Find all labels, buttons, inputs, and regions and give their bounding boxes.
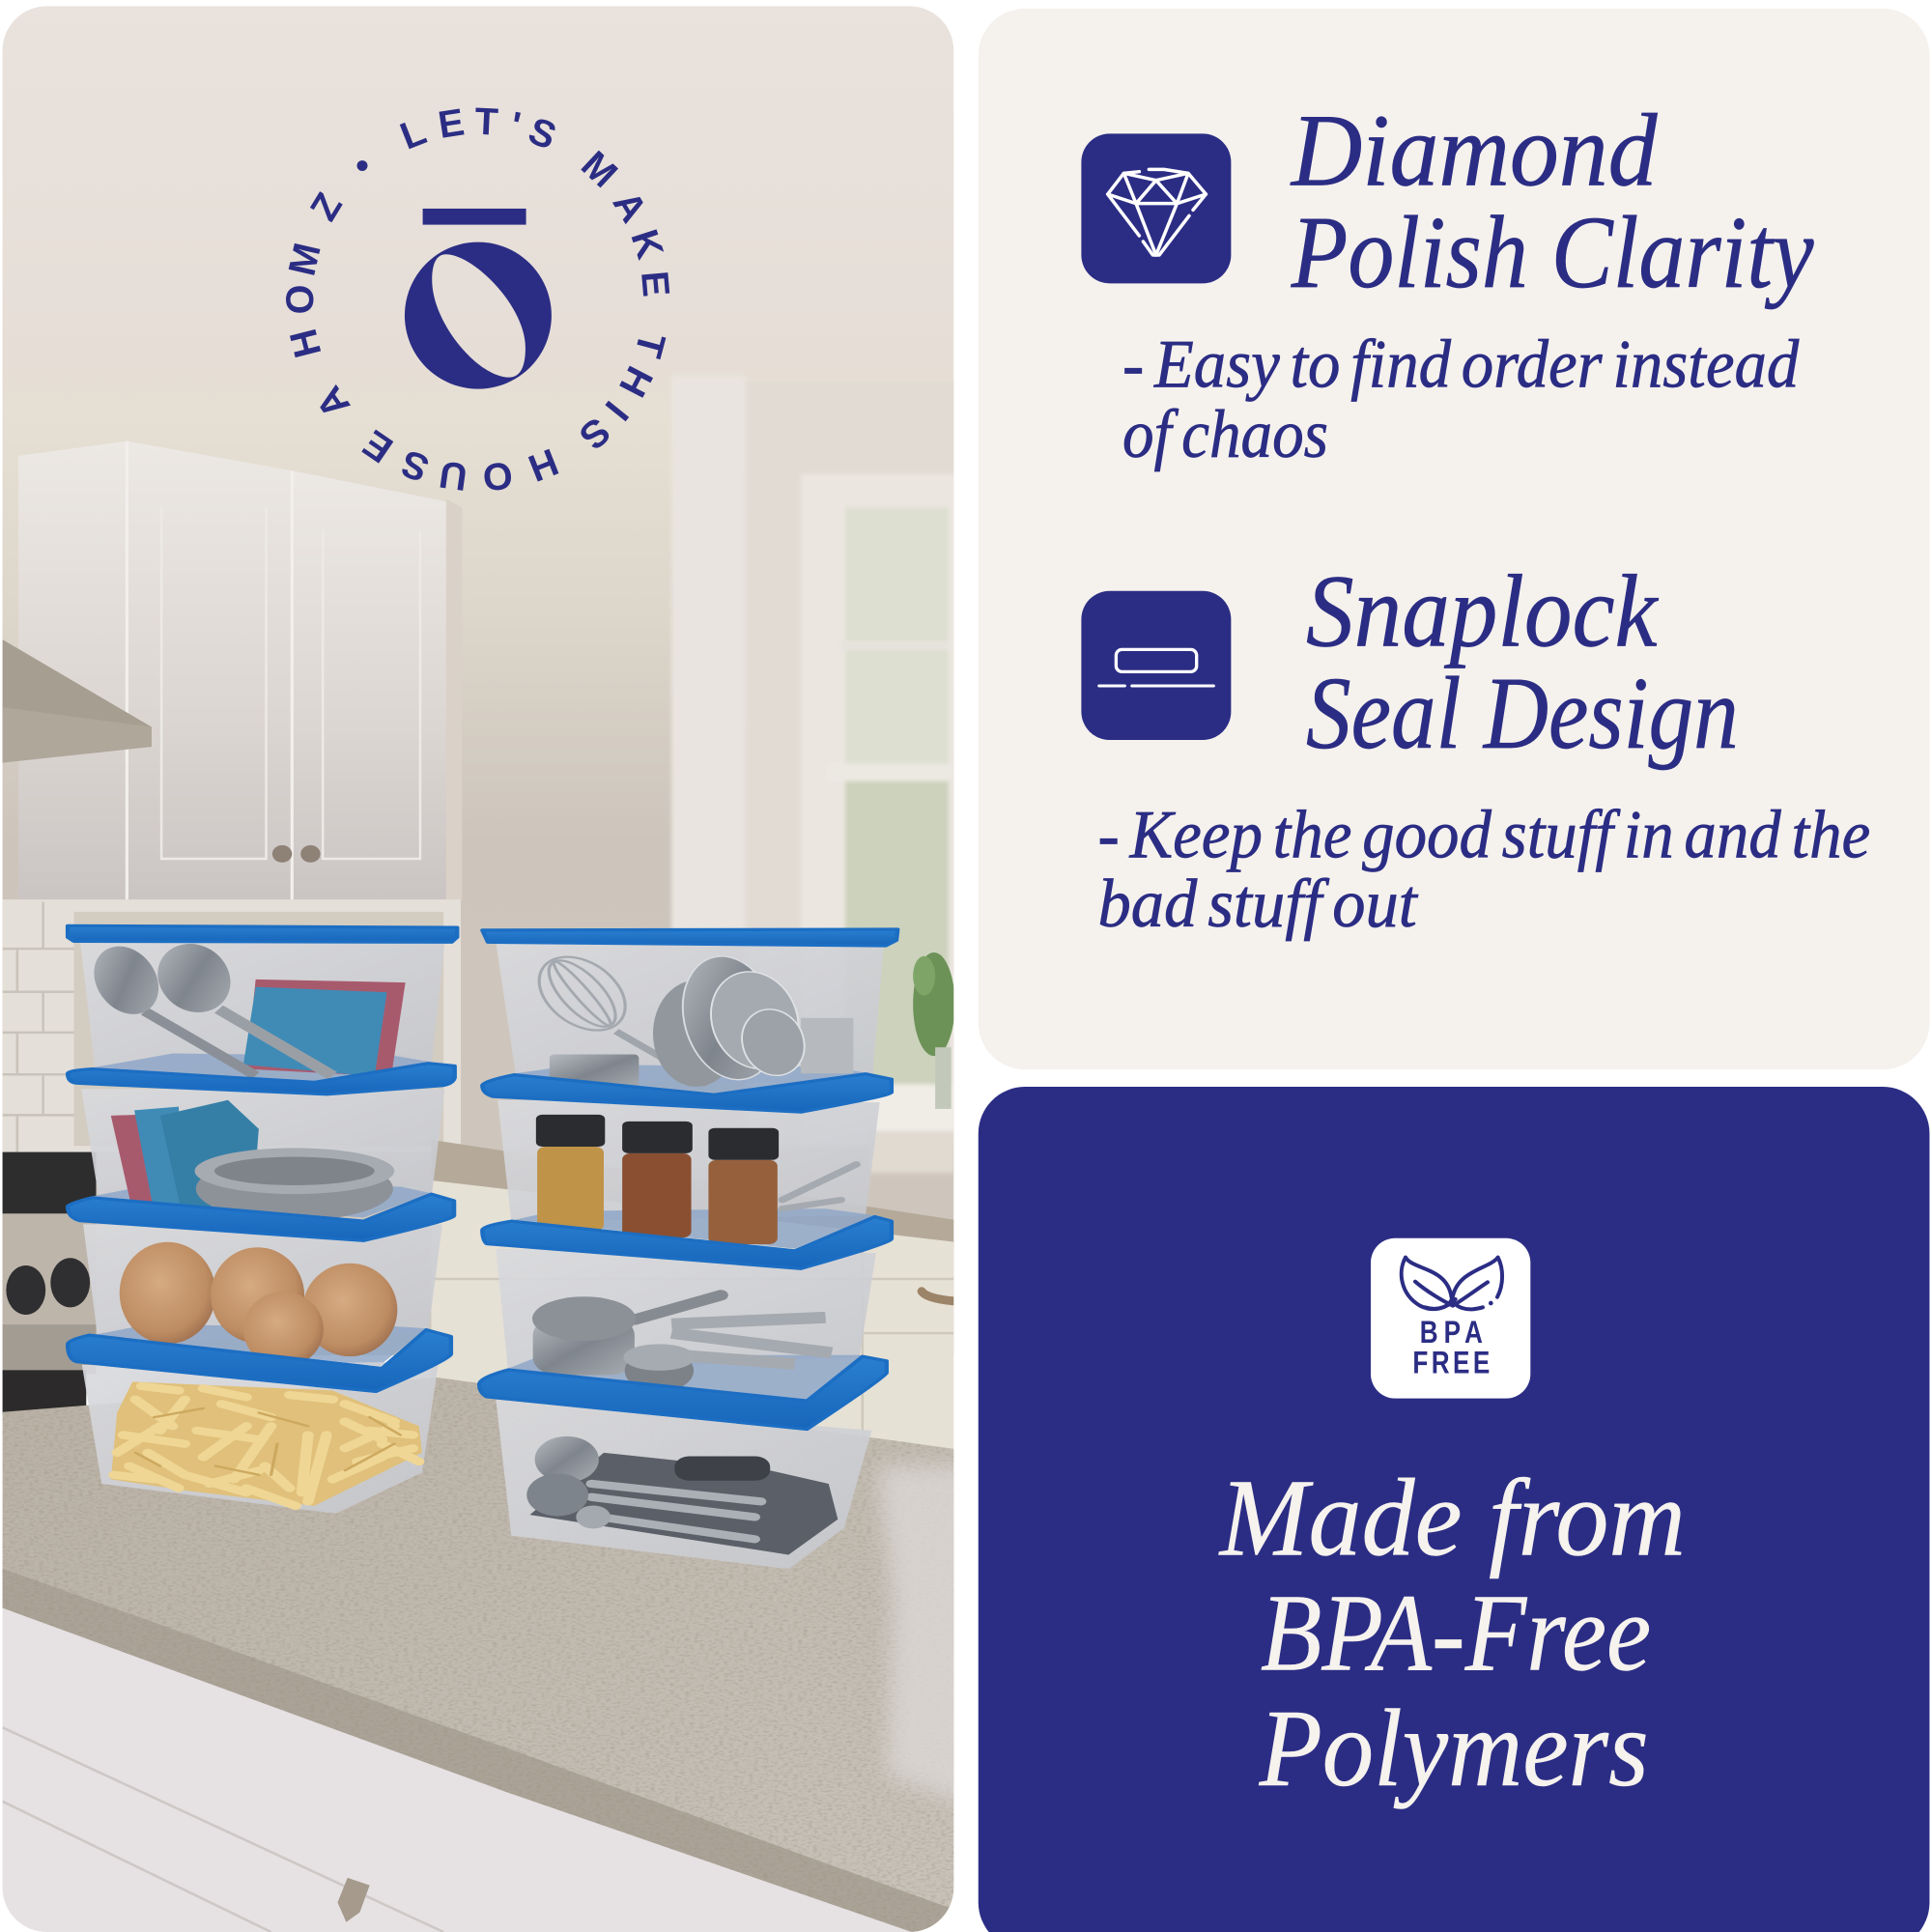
white upper cabinet — [18, 441, 462, 899]
text: easy to find: of chaos — [1122, 396, 1328, 472]
circular slogan text: E — [633, 270, 677, 298]
circular slogan text: U — [437, 452, 470, 498]
granite countertop — [0, 1368, 985, 1932]
heading: snaplock seal design: Snaplock — [1306, 554, 1660, 668]
window wall trim — [671, 376, 961, 1173]
circular slogan text: M — [573, 143, 625, 196]
kitchen wall and ceiling — [0, 0, 961, 1355]
circular slogan text: H — [282, 325, 330, 362]
circular slogan text: K — [622, 224, 671, 265]
left stack: box with ladles — [68, 925, 457, 1081]
circular slogan text: I — [597, 393, 637, 428]
circular slogan text: S — [571, 409, 618, 458]
potted plant — [913, 952, 955, 1109]
circular slogan text: S — [395, 441, 435, 490]
circular slogan text: T — [473, 100, 499, 144]
circular slogan text: O — [480, 453, 515, 498]
icon: bpa free leaves badge: FREE — [1412, 1346, 1490, 1380]
right stack: box with measuring cups — [482, 1217, 892, 1400]
text: keep the good stuff: bad stuff out — [1097, 866, 1419, 942]
circular slogan text: ' — [506, 104, 525, 148]
right stack: box with whisk and cups — [482, 929, 897, 1094]
circular slogan text: O — [279, 285, 322, 314]
left stack: box with onions — [68, 1194, 454, 1367]
logo mark: o with macron — [405, 209, 552, 389]
icon: snaplock seal — [1081, 591, 1231, 740]
left stack: box with boards and bowls — [68, 1064, 455, 1221]
container stacks — [68, 925, 897, 1569]
circular slogan text: M — [281, 240, 329, 280]
circular slogan text: T — [626, 328, 673, 362]
circular slogan text: H — [523, 440, 564, 490]
circular slogan text: E — [436, 100, 467, 147]
right stack: box with measuring spoons — [479, 1356, 887, 1569]
icon: diamond — [1081, 133, 1231, 283]
stove — [3, 1152, 96, 1414]
panel: bpa free — [979, 1087, 1929, 1932]
heading: made from bpa-free polymers: BPA-Free — [1261, 1571, 1651, 1693]
heading: made from bpa-free polymers: Made from — [1218, 1457, 1686, 1579]
panel: features — [979, 9, 1929, 1069]
circular slogan text: S — [523, 109, 562, 158]
heading: snaplock seal design: Seal Design — [1306, 657, 1739, 771]
icon: bpa free leaves badge — [1371, 1238, 1530, 1399]
left stack: box with pasta — [68, 1330, 451, 1514]
heading: made from bpa-free polymers: Polymers — [1259, 1687, 1649, 1809]
panel: kitchen photo with stacked containers — [0, 0, 985, 1932]
right stack: box with spice jars — [482, 1074, 892, 1249]
heading: diamond polish clarity: Diamond — [1290, 94, 1658, 208]
text: easy to find: - Easy to find order instead — [1122, 327, 1800, 403]
heading: diamond polish clarity: Polish Clarity — [1291, 196, 1814, 310]
circular slogan text: A — [605, 184, 655, 230]
text: keep the good stuff: - Keep the good stuff in and the — [1097, 797, 1870, 873]
circular slogan text: H — [611, 359, 661, 404]
back counter and lower cabinets — [431, 1140, 955, 1460]
circular slogan text — [279, 100, 677, 498]
circular brand seal — [279, 100, 677, 498]
tile backsplash — [3, 899, 461, 1155]
circular slogan text: E — [355, 421, 401, 470]
icon: bpa free leaves badge: BPA — [1420, 1315, 1483, 1350]
circular slogan text: A — [308, 379, 358, 426]
circular slogan text: L — [395, 110, 432, 158]
circular slogan text: Z — [302, 185, 351, 228]
range hood — [3, 639, 152, 763]
